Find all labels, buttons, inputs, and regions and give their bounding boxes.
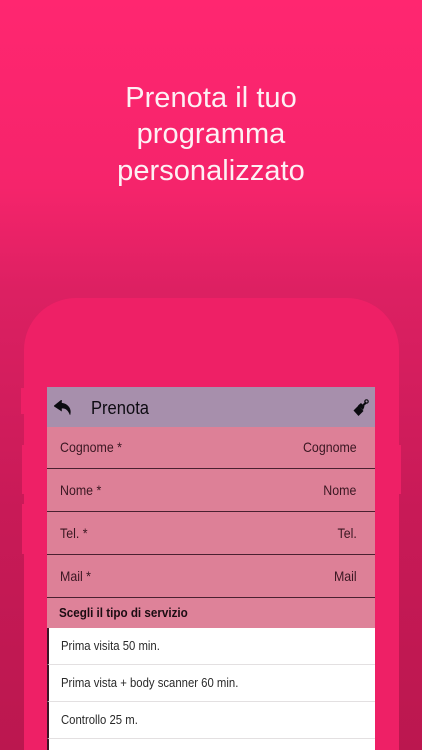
- phone side button: left bottom: [22, 504, 24, 554]
- item text: Prima vista + body scanner 60 min.: [61, 676, 238, 690]
- header title: Prenota: [90, 398, 149, 418]
- icon: paint brush: [354, 399, 369, 416]
- field label: Tel. *: [60, 525, 88, 541]
- phone side button: right: [399, 445, 401, 494]
- section heading text: Scegli il tipo di servizio: [59, 605, 188, 620]
- form row: Cognome: [47, 427, 375, 469]
- phone side button: left middle: [22, 445, 24, 494]
- title: personalizzato: [117, 154, 305, 186]
- field label: Cognome *: [60, 439, 122, 455]
- field placeholder: Cognome: [303, 439, 356, 455]
- field label: Mail *: [60, 568, 91, 584]
- list item: Controllo: [47, 702, 375, 739]
- form row: Nome: [47, 469, 375, 512]
- list item: empty cropped row: [47, 739, 375, 750]
- section heading: [47, 598, 375, 628]
- item text: Prima visita 50 min.: [61, 639, 160, 653]
- title: programma: [137, 118, 285, 150]
- phone body: [24, 298, 399, 750]
- phone side button: left top: [21, 388, 24, 414]
- item text: Controllo 25 m.: [61, 713, 138, 727]
- form row: Mail: [47, 555, 375, 598]
- title: Prenota il tuo: [125, 82, 297, 114]
- form row: Tel: [47, 512, 375, 555]
- field placeholder: Tel.: [337, 525, 356, 541]
- field label: Nome *: [60, 482, 101, 498]
- icon: back arrow: [54, 400, 71, 415]
- field placeholder: Nome: [323, 482, 356, 498]
- list item: Prima vista + body scanner: [47, 665, 375, 702]
- title: [117, 82, 305, 186]
- list item: Prima visita: [47, 628, 375, 665]
- field placeholder: Mail: [334, 568, 356, 584]
- app header bar: [47, 387, 375, 427]
